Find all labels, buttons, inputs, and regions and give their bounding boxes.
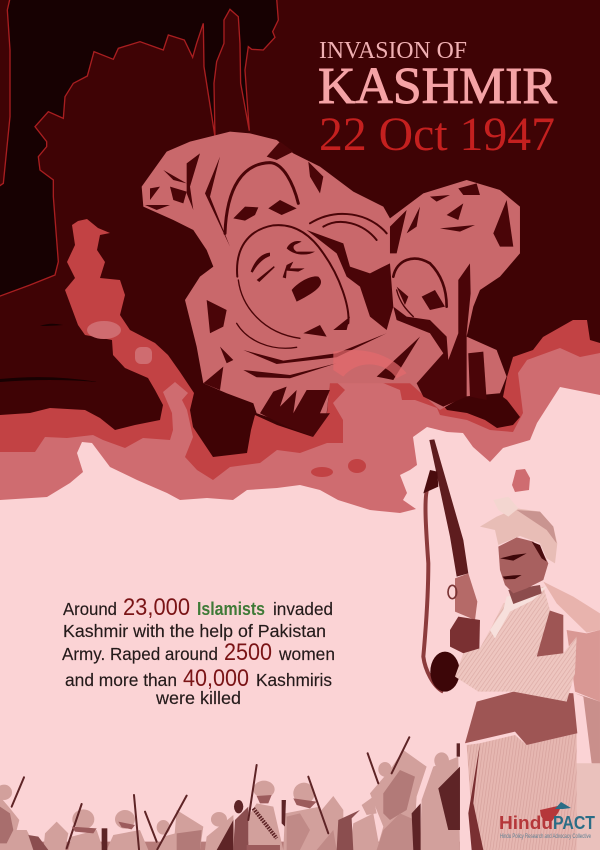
statistics paragraph: were killed xyxy=(155,688,241,708)
logo wordmark Hindu: Hindu xyxy=(499,813,553,833)
collar xyxy=(490,587,547,638)
neck xyxy=(508,585,542,604)
statistics paragraph: Kashmiris xyxy=(256,670,332,690)
statistics paragraph xyxy=(62,594,335,708)
lower-right woman's eyes xyxy=(422,290,445,310)
ground band of figures xyxy=(7,842,460,850)
far trouser xyxy=(575,763,600,850)
title line: Kashmir: KASHMIR xyxy=(318,58,557,115)
waistcoat xyxy=(465,692,577,745)
crowd of soldiers xyxy=(0,737,460,850)
trouser shading xyxy=(468,743,483,850)
blood-stain layers xyxy=(0,0,600,513)
dark folds and shadows xyxy=(145,142,513,437)
rifle barrel xyxy=(429,439,468,577)
shaded figures xyxy=(0,770,415,850)
old woman's features xyxy=(458,183,480,195)
dark clothing xyxy=(102,743,460,850)
red stain layer xyxy=(0,200,600,480)
back sash xyxy=(567,630,600,702)
turban shading xyxy=(517,510,557,543)
central woman's brows and eyes xyxy=(251,253,270,273)
dark streak xyxy=(40,324,63,326)
gripping hand xyxy=(450,617,480,653)
coral bleed over map xyxy=(333,350,407,378)
rifle trigger guard xyxy=(448,585,457,599)
title line: date: 22 Oct 1947 xyxy=(319,109,555,161)
red spot xyxy=(348,459,366,473)
salmon island xyxy=(512,469,530,492)
rifle strap xyxy=(423,487,443,692)
turban xyxy=(480,508,557,563)
bandolier xyxy=(253,808,277,838)
statistics paragraph: 23,000 xyxy=(123,594,190,621)
red spot xyxy=(311,467,333,477)
rifle receiver xyxy=(455,573,477,620)
faces xyxy=(233,183,480,310)
straps and turban shadows xyxy=(72,795,317,850)
dark streak xyxy=(0,377,98,382)
statistics paragraph: Kashmir with the help of Pakistan xyxy=(63,621,326,641)
black shadow with jagged red outline xyxy=(0,0,278,297)
far arm xyxy=(575,693,600,765)
statistics paragraph: Islamists xyxy=(197,599,265,619)
rifles xyxy=(12,737,409,849)
statistics paragraph: 40,000 xyxy=(183,665,249,692)
statistics paragraph: women xyxy=(278,644,335,664)
title line: invasion of: INVASION OF xyxy=(319,38,467,64)
map of Kashmir with grieving women xyxy=(142,132,520,437)
map silhouette xyxy=(142,132,520,437)
logo wordmark PACT: PACT xyxy=(553,813,595,833)
rifle butt xyxy=(430,652,460,692)
upper woman's eyes xyxy=(233,207,258,221)
scarf xyxy=(543,582,600,633)
statistics paragraph: Army. Raped around xyxy=(62,644,218,664)
statistics paragraph: and more than xyxy=(65,670,177,690)
turban knot xyxy=(493,497,518,517)
face xyxy=(498,537,548,593)
statistics paragraph: invaded xyxy=(273,599,333,619)
dark maroon field xyxy=(0,0,600,457)
rifle sight xyxy=(423,470,438,493)
statistics paragraph: 2500 xyxy=(224,639,272,666)
logo bird xyxy=(555,802,571,809)
salmon patch small xyxy=(135,347,152,364)
central woman's open mouth xyxy=(292,276,321,302)
facial features xyxy=(500,553,527,579)
upper waistcoat xyxy=(537,610,563,657)
salmon stain layer xyxy=(0,200,600,513)
soldiers' bodies xyxy=(0,750,460,850)
statistics paragraph: Around xyxy=(63,599,117,619)
logo flag xyxy=(540,805,562,821)
salmon patch xyxy=(87,321,121,339)
title xyxy=(318,38,557,161)
trousers xyxy=(467,733,577,850)
HinduPACT logo xyxy=(499,802,595,840)
hair xyxy=(532,542,547,562)
shirt and sash xyxy=(455,587,577,702)
headscarf lines xyxy=(225,163,447,348)
tribal fighter holding a rifle xyxy=(423,439,600,850)
